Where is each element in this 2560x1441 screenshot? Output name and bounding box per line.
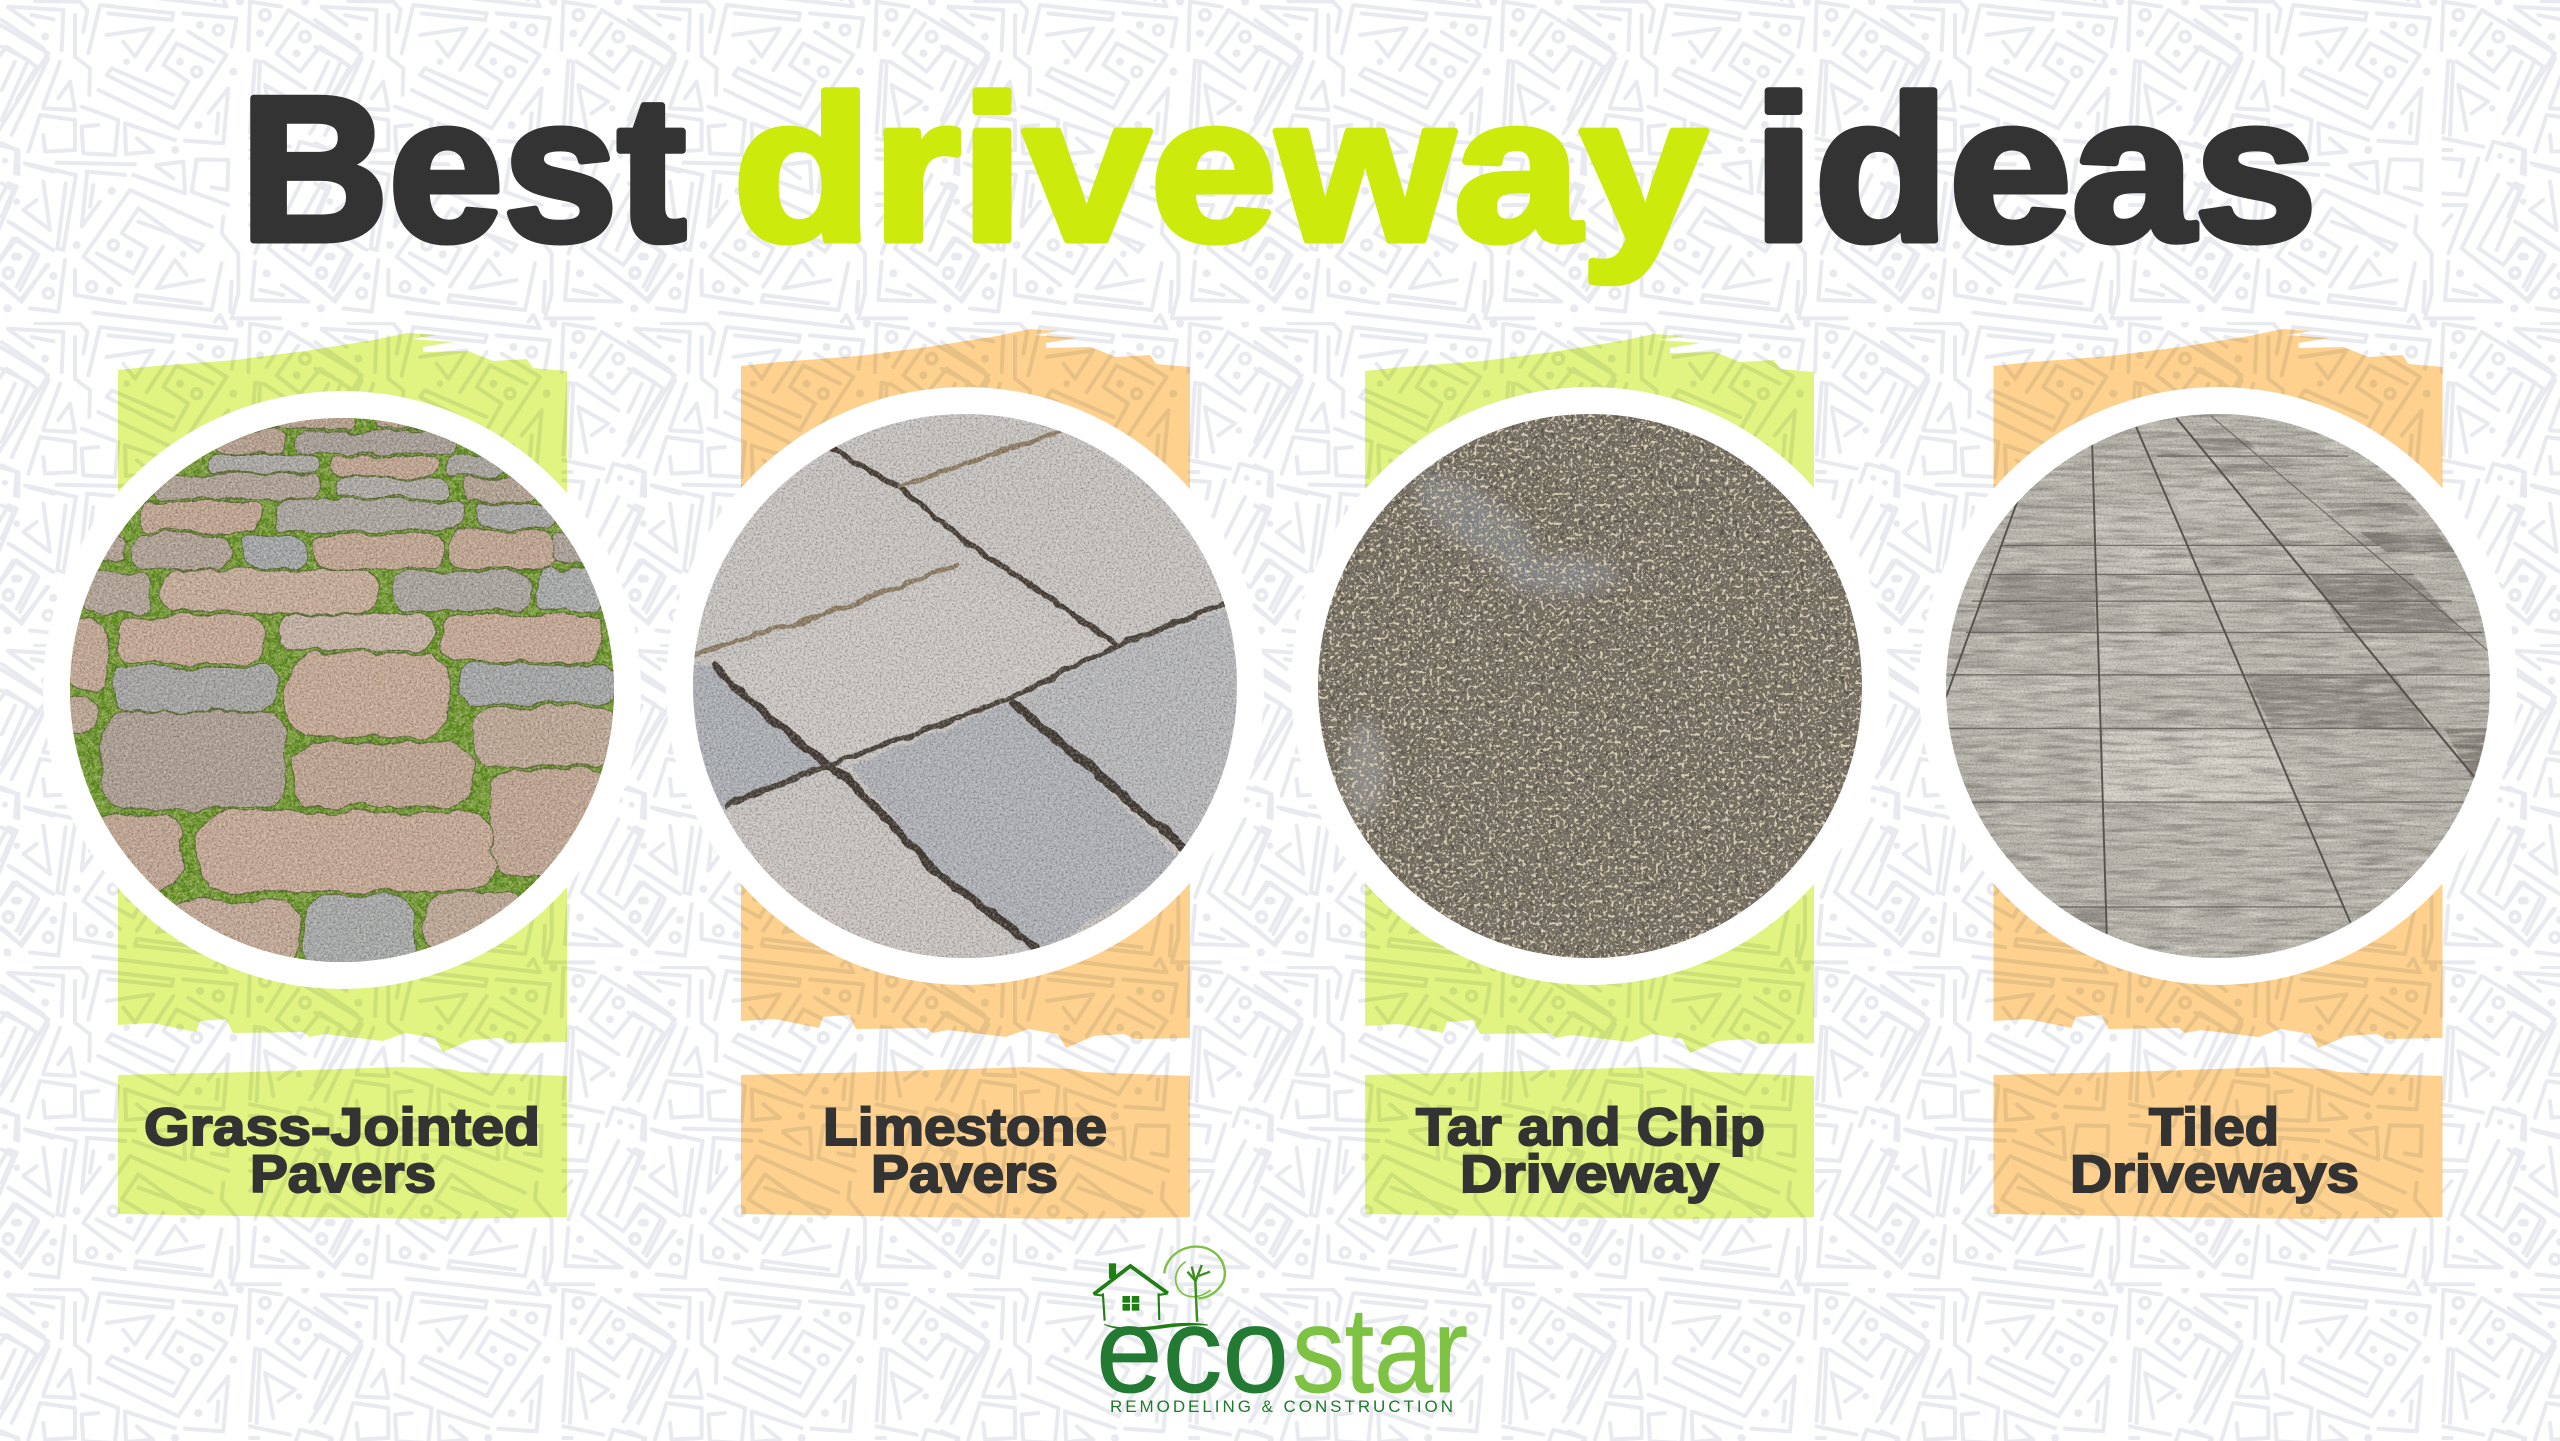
label text: Driveways — [2070, 1145, 2359, 1204]
white photo ring — [1919, 387, 2517, 985]
label text: Tiled — [2149, 1098, 2279, 1157]
photo: limestone pavers — [690, 410, 1240, 969]
title: ideas — [1753, 54, 2317, 284]
wordmark: eco — [1096, 1282, 1289, 1418]
label text: Driveway — [1460, 1145, 1720, 1204]
panel: grass-jointed pavers — [43, 333, 641, 1219]
white photo ring — [1291, 387, 1889, 985]
label box — [741, 1067, 1190, 1219]
label text — [1416, 1098, 1765, 1204]
brush background — [1994, 329, 2442, 1048]
photo: tiled surface — [1940, 410, 2496, 966]
panel: limestone pavers — [666, 329, 1264, 1219]
white photo ring — [43, 391, 641, 989]
label text: Limestone — [823, 1098, 1107, 1157]
label text: Grass-Jointed — [144, 1098, 540, 1157]
logo: ecostar — [1094, 1247, 1468, 1418]
label box — [1365, 1067, 1814, 1219]
photo: grass-jointed pavers — [60, 410, 630, 980]
label text — [2070, 1098, 2359, 1204]
label box — [1994, 1067, 2442, 1219]
label text — [823, 1098, 1107, 1204]
label text — [144, 1098, 540, 1204]
label text: Pavers — [871, 1145, 1058, 1204]
brush background — [741, 329, 1190, 1048]
tagline: REMODELING & CONSTRUCTION — [1110, 1397, 1453, 1416]
icon: house and tree — [1094, 1247, 1225, 1330]
logo: ecostar: star — [1292, 1282, 1468, 1418]
label text: Pavers — [250, 1145, 436, 1204]
title — [240, 54, 2317, 284]
title: driveway — [733, 54, 1707, 284]
brush background — [1365, 334, 1814, 1053]
label box — [118, 1067, 567, 1219]
label text: Tar and Chip — [1416, 1098, 1765, 1157]
brush background — [118, 333, 567, 1052]
photo: tar and chip surface — [1315, 410, 1865, 960]
panel: tar and chip driveway — [1291, 334, 1889, 1219]
white photo ring — [666, 387, 1264, 985]
panel: tiled driveways — [1919, 329, 2517, 1219]
title: Best — [240, 54, 686, 284]
